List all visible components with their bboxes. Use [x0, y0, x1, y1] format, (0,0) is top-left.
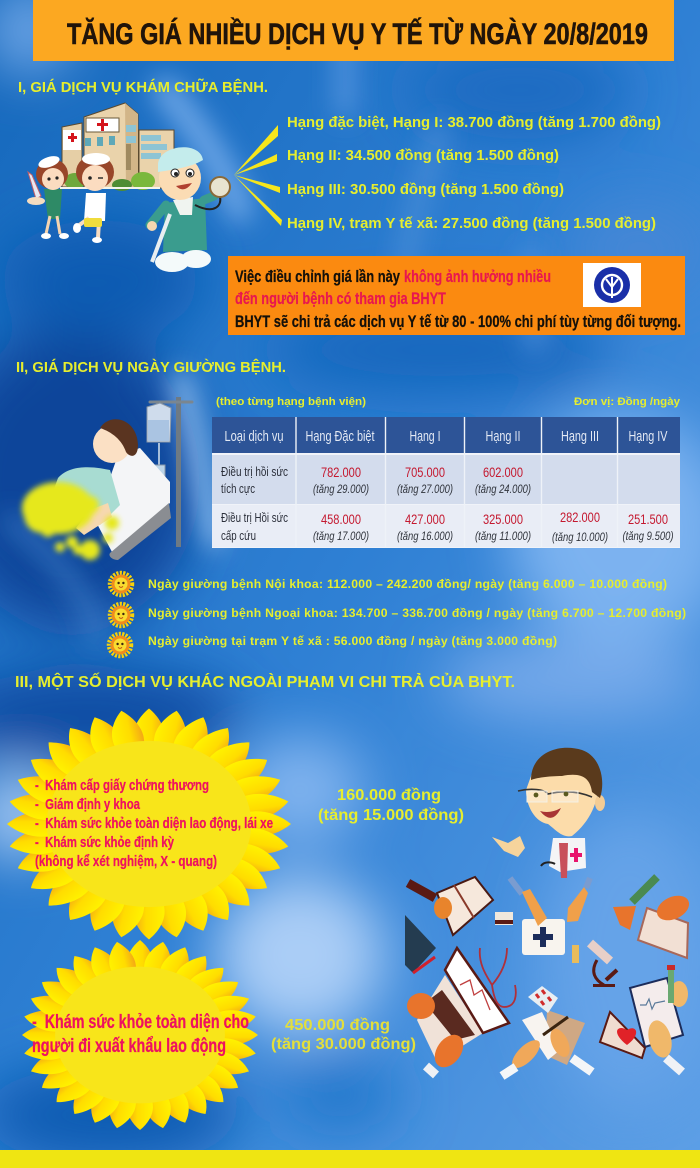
clipboard and heart card: [600, 965, 688, 1072]
badge and vial: [495, 912, 579, 963]
table: bed day prices: 602.000: [483, 465, 523, 480]
sunburst 1: services list: - Giám định y khoa: [35, 796, 140, 813]
medical kit: [510, 878, 590, 955]
icon: sun bullet 2: [110, 604, 132, 626]
sunburst 1: services list: [7, 708, 291, 940]
list: bed day rates: Ngày giường tại trạm Y tế xã : 56.000 đồng / ngày (tăng 3.000 đồng): [148, 634, 557, 648]
price list: examination by hospital grade: Hạng IV, trạm Y tế xã: 27.500 đồng (tăng 1.500 đồng): [287, 216, 656, 232]
table: bed day prices: (tăng 17.000): [313, 529, 369, 543]
illustration: cartoon doctor: [147, 147, 230, 272]
table: bed day prices: 282.000: [560, 510, 600, 525]
table: bed day prices: (tăng 11.000): [475, 529, 531, 543]
table: bed day prices: 325.000: [483, 512, 523, 527]
table: bed day prices: tích cực: [221, 481, 255, 496]
table: bed day prices: (tăng 16.000): [397, 529, 453, 543]
sunburst 1: services list: (không kể xét nghiệm, X - quang): [35, 853, 217, 870]
illustration: medical desk items: [405, 877, 693, 1076]
illustration: hospital: [60, 103, 174, 191]
callout: BHYT note: đến người bệnh có tham gia BHYT: [235, 290, 446, 308]
table: bed day prices: Hạng IV: [628, 429, 668, 445]
price 2: 450.000 đồng: [285, 1017, 390, 1034]
price 1: [318, 787, 464, 824]
list: bed day rates: [148, 577, 686, 648]
table: bed day prices: 251.500: [628, 512, 668, 527]
table: bed day prices: 458.000: [321, 512, 361, 527]
table: bed day prices: Hạng II: [486, 429, 520, 445]
price 1: 160.000 đồng: [337, 787, 441, 804]
table: bed day prices: Hạng Đặc biệt: [306, 429, 374, 445]
bottom yellow bar: [0, 1150, 700, 1168]
note: by hospital grade: (theo từng hạng bệnh viện): [216, 396, 366, 408]
illustration: doctor with glasses: [492, 748, 605, 878]
illustration: nurse with syringe: [27, 154, 69, 239]
table: bed day prices: [212, 417, 680, 548]
heading: section I: I, GIÁ DỊCH VỤ KHÁM CHỮA BỆNH.: [18, 78, 268, 96]
laptop: [407, 948, 509, 1075]
price list: examination by hospital grade: Hạng đặc biệt, Hạng I: 38.700 đồng (tăng 1.700 đồng): [287, 115, 661, 131]
black book: [405, 915, 436, 973]
prescription and pills: [502, 986, 592, 1076]
callout: BHYT note: Việc điều chỉnh giá lần này: [235, 268, 401, 286]
table: bed day prices: (tăng 9.500): [622, 529, 674, 543]
rays pointing to prices: [234, 125, 282, 226]
sunburst 2: export labour check-up: - Khám sức khỏe toàn diện cho: [32, 1012, 249, 1033]
sunburst 1: services list: - Khám cấp giấy chứng thương: [35, 777, 209, 794]
microscope: [590, 943, 617, 987]
stethoscope: [480, 948, 516, 1007]
pen and hand on tablet: [613, 877, 693, 958]
table: bed day prices: cấp cứu: [221, 528, 256, 543]
illustration: nurse with bag: [73, 153, 114, 243]
title banner: [33, 0, 674, 61]
table: bed day prices: Hạng I: [410, 429, 440, 445]
illustration: patient in bed with IV: [50, 397, 192, 560]
price 2: (tăng 30.000 đồng): [271, 1036, 416, 1053]
table: bed day prices: 427.000: [405, 512, 445, 527]
list: bed day rates: Ngày giường bệnh Ngoại khoa: 134.700 – 336.700 đồng / ngày (tăng 6.700 – 12.700 đồng): [148, 606, 686, 620]
price 2: [271, 1017, 416, 1053]
table: bed day prices: (tăng 27.000): [397, 482, 453, 496]
table: bed day prices: Điều trị Hồi sức: [221, 510, 288, 525]
table: bed day prices: (tăng 10.000): [552, 530, 608, 544]
note: unit: Đơn vị: Đồng /ngày: [574, 396, 681, 408]
heading: section III: III, MỘT SỐ DỊCH VỤ KHÁC NGOÀI PHẠM VI CHI TRẢ CỦA BHYT.: [15, 673, 515, 691]
table: bed day prices: Hạng III: [561, 429, 599, 445]
list: bed day rates: Ngày giường bệnh Nội khoa: 112.000 – 242.200 đồng/ ngày (tăng 6.000 – 10.000 đồng): [148, 577, 667, 591]
icon: sun bullet 3: [110, 634, 130, 656]
heading: section II: II, GIÁ DỊCH VỤ NGÀY GIƯỜNG BỆNH.: [16, 358, 286, 376]
table: bed day prices: (tăng 24.000): [475, 482, 531, 496]
table: bed day prices: Loại dịch vụ: [224, 429, 284, 445]
table: bed day prices: Điều trị hồi sức: [221, 464, 288, 479]
sunburst 1: services list: - Khám sức khỏe định kỳ: [35, 834, 174, 851]
yellow glow over blanket: [22, 482, 119, 560]
table: bed day prices: 782.000: [321, 465, 361, 480]
sunburst 1: services list: - Khám sức khỏe toàn diện lao động, lái xe: [35, 815, 273, 832]
price list: examination by hospital grade: [287, 115, 661, 232]
icon: social insurance logo: [583, 263, 641, 307]
price 1: (tăng 15.000 đồng): [318, 807, 464, 824]
callout: BHYT note: [228, 256, 685, 335]
price list: examination by hospital grade: Hạng II: 34.500 đồng (tăng 1.500 đồng): [287, 148, 559, 164]
icon: sun bullet 1: [110, 574, 132, 594]
price list: examination by hospital grade: Hạng III: 30.500 đồng (tăng 1.500 đồng): [287, 182, 564, 198]
sunburst 2: export labour check-up: người đi xuất khẩu lao động: [32, 1036, 226, 1057]
sunburst 2: export labour check-up: [22, 940, 258, 1130]
table: bed day prices: 705.000: [405, 465, 445, 480]
open notebook: [408, 877, 493, 935]
callout: BHYT note: không ảnh hưởng nhiều: [404, 268, 551, 286]
table: bed day prices: (tăng 29.000): [313, 482, 369, 496]
